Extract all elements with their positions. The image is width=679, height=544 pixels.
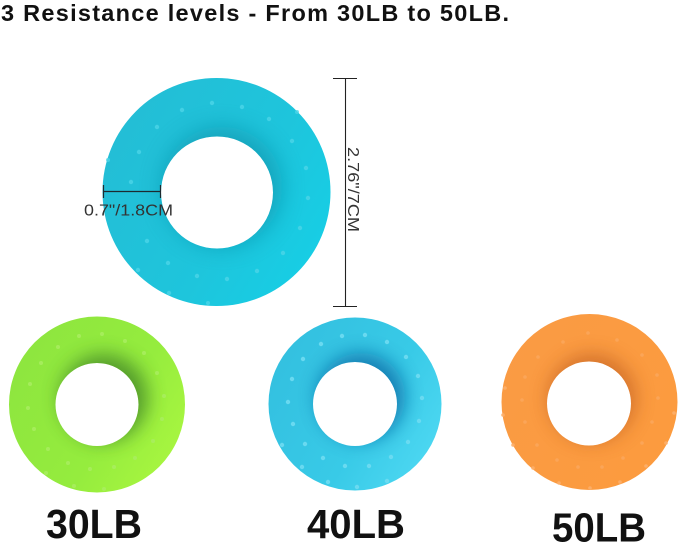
large blue grip ring	[102, 78, 331, 307]
width dimension marker: 0.7"/1.8CM	[84, 202, 173, 220]
height dimension marker: 2.76"/7CM	[344, 147, 361, 232]
height dimension marker	[333, 78, 361, 306]
blue 40LB ring	[267, 316, 443, 492]
green 30LB ring	[8, 316, 186, 494]
width dimension marker	[84, 185, 173, 220]
orange 50LB ring	[500, 312, 679, 492]
title: 3 Resistance levels - From 30LB to 50LB.	[1, 0, 509, 26]
